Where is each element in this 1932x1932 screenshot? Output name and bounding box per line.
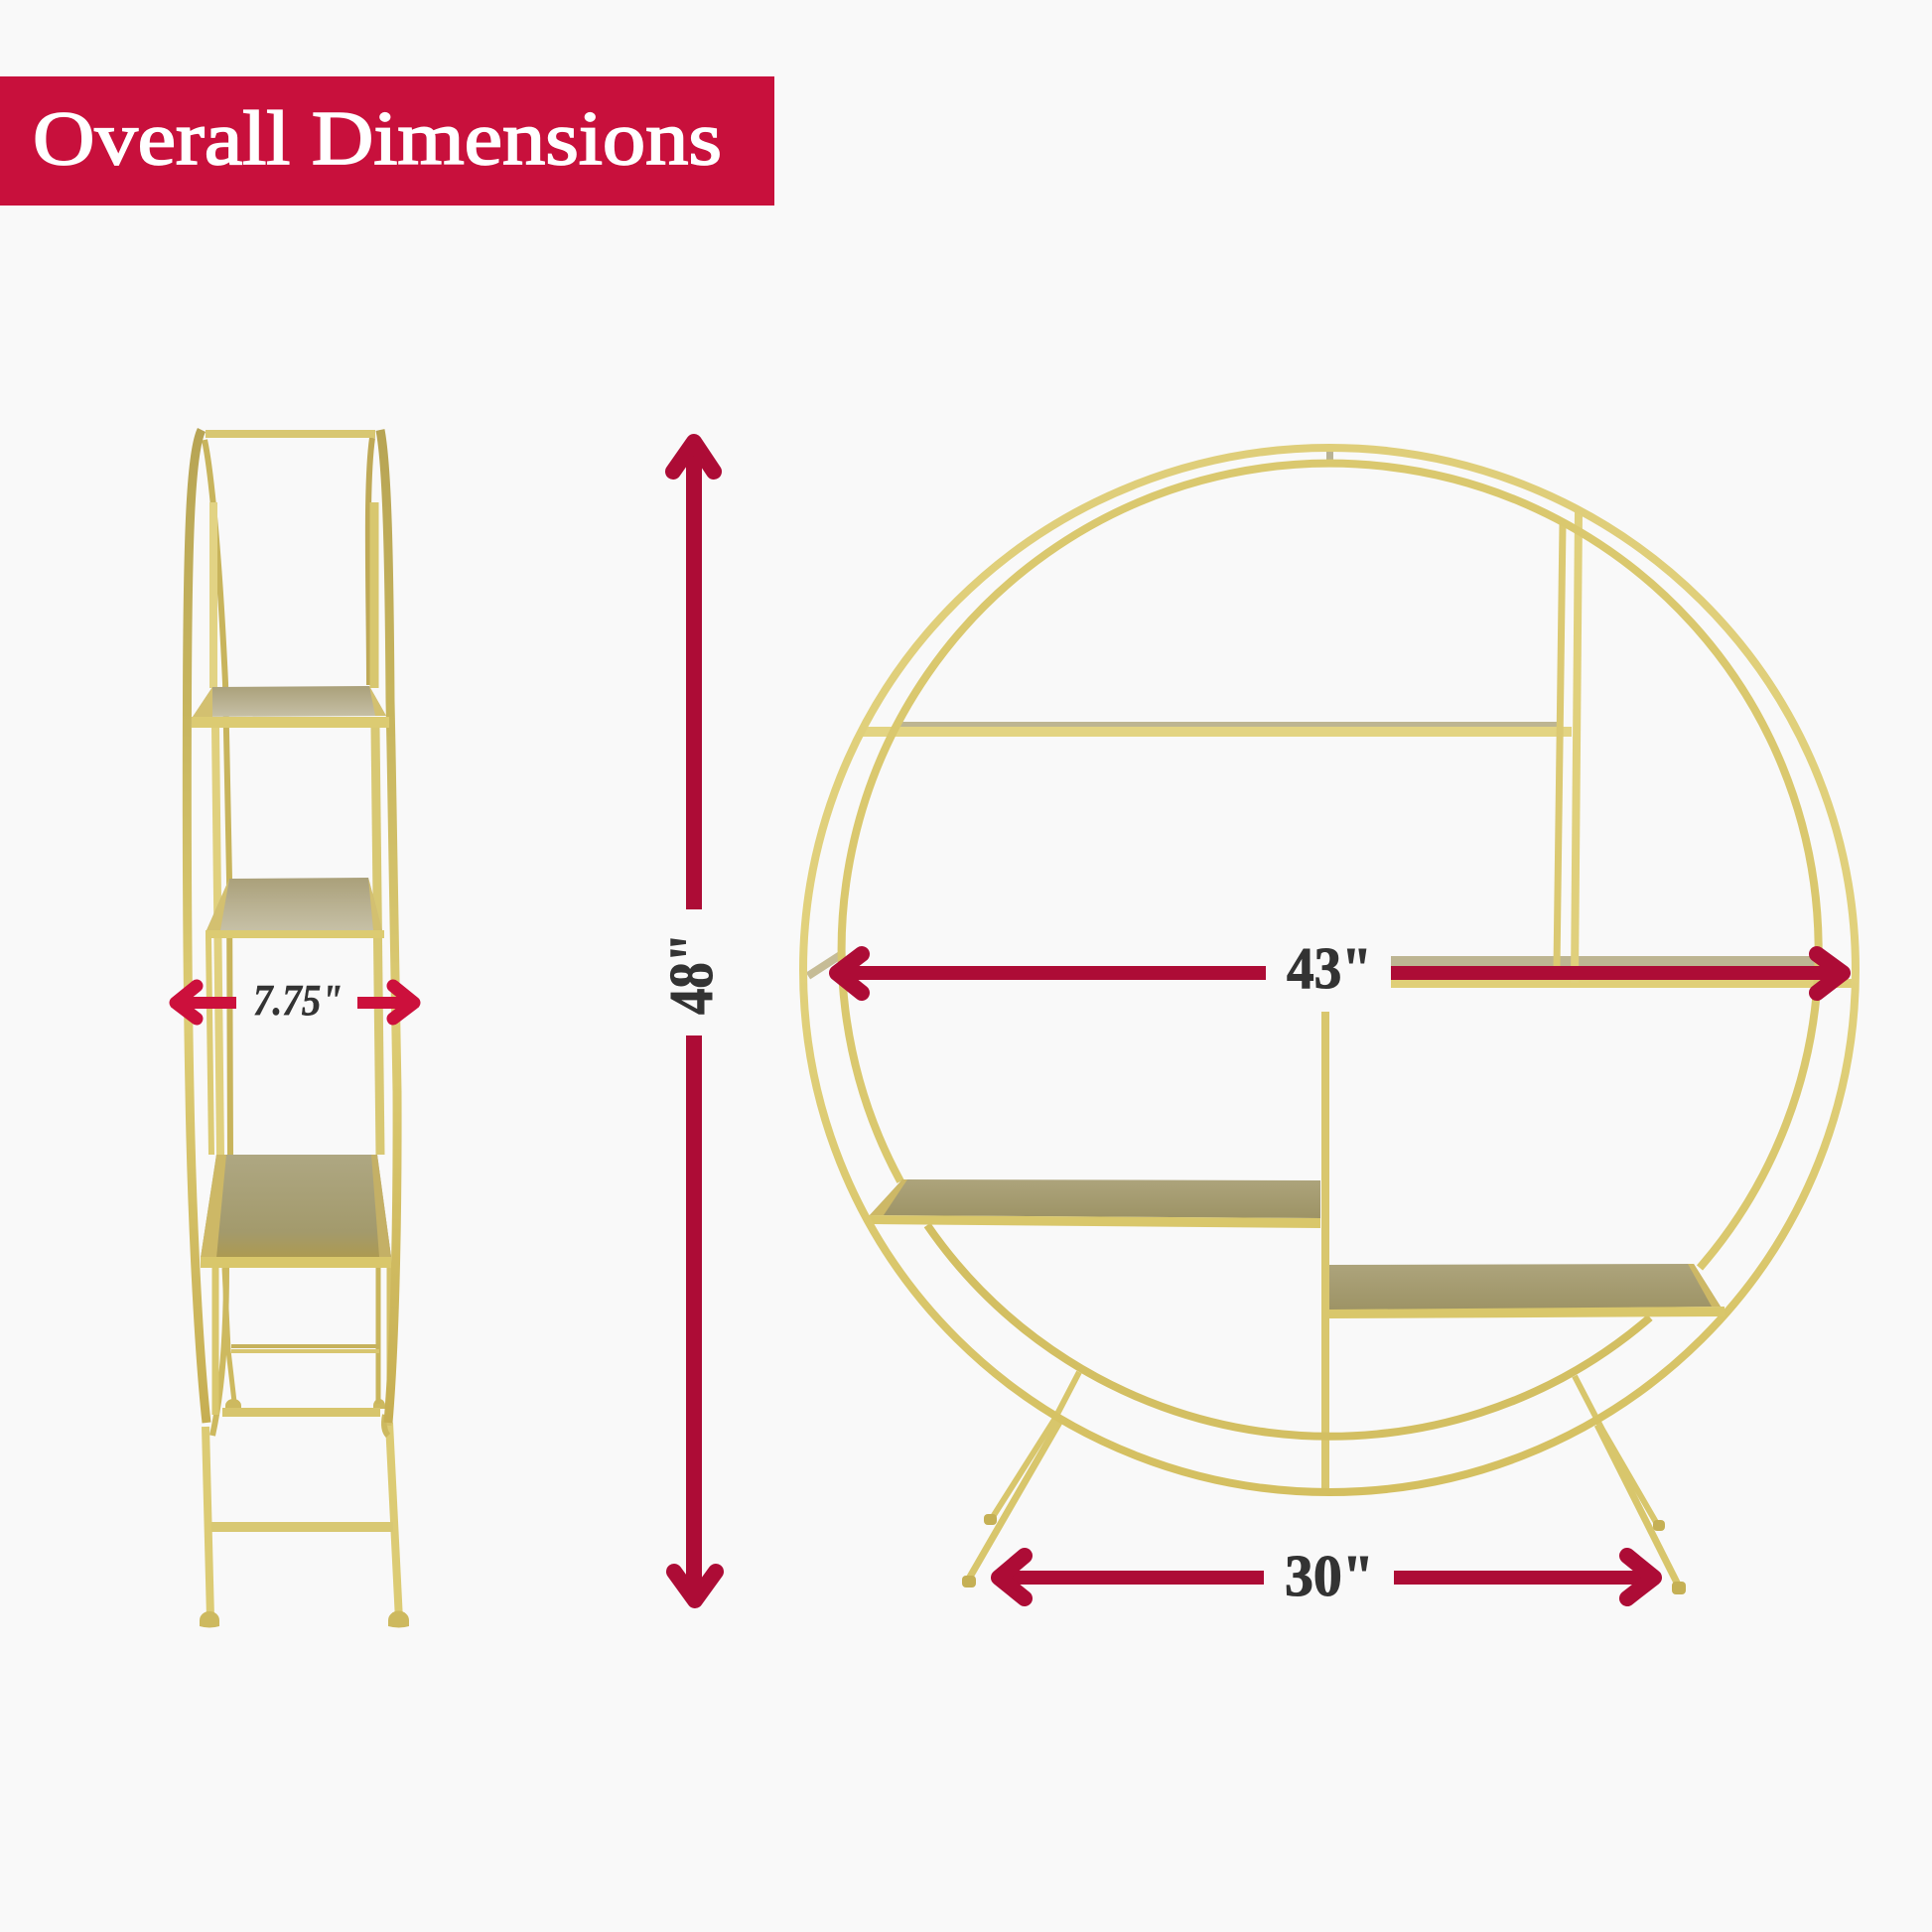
front view: shelf 4 bbox=[1329, 1264, 1725, 1318]
front view: inner ring bbox=[842, 464, 1819, 1437]
side view: top bar bbox=[206, 430, 375, 438]
side view: shelf 3 bbox=[201, 1155, 391, 1268]
front view: left stub bbox=[808, 954, 842, 976]
height arrow: 48 inches bbox=[673, 442, 716, 1600]
width arrow: 43 inches bbox=[837, 954, 1843, 993]
base width arrow: 30 inches bbox=[999, 1556, 1654, 1598]
depth arrow: 7.75 inches bbox=[176, 986, 414, 1019]
front view: shelf 2 bbox=[1390, 956, 1853, 988]
43 inch width label mask bbox=[1266, 931, 1391, 1012]
front view: upright posts bbox=[1325, 512, 1579, 1489]
front view: shelf 3 bbox=[869, 1179, 1320, 1228]
side view: lower cross bars bbox=[222, 1344, 380, 1417]
title banner bbox=[0, 76, 774, 206]
depth label: 7.75" bbox=[253, 976, 343, 1025]
front view: top bracket bbox=[1326, 450, 1333, 465]
front view: outer ring bbox=[803, 448, 1856, 1492]
side view: shelf 1 bbox=[192, 686, 389, 728]
front view: feet bbox=[962, 1514, 1686, 1594]
side view: shelf 2 bbox=[206, 878, 384, 938]
side view of shelf bbox=[187, 430, 409, 1628]
front view: legs bbox=[969, 1372, 1679, 1587]
front view of shelf bbox=[803, 448, 1856, 1594]
width label: 43" bbox=[1287, 935, 1372, 1001]
height label: 48" bbox=[658, 933, 726, 1015]
side view: inner rear ring and posts bbox=[205, 438, 389, 1436]
side view: feet bbox=[200, 1399, 409, 1628]
title: Overall Dimensions bbox=[33, 95, 722, 181]
side view: legs bbox=[206, 1423, 399, 1620]
base width label: 30" bbox=[1285, 1543, 1374, 1608]
side view: outer ring bbox=[187, 430, 397, 1423]
front view: shelf 1 bbox=[863, 722, 1572, 737]
